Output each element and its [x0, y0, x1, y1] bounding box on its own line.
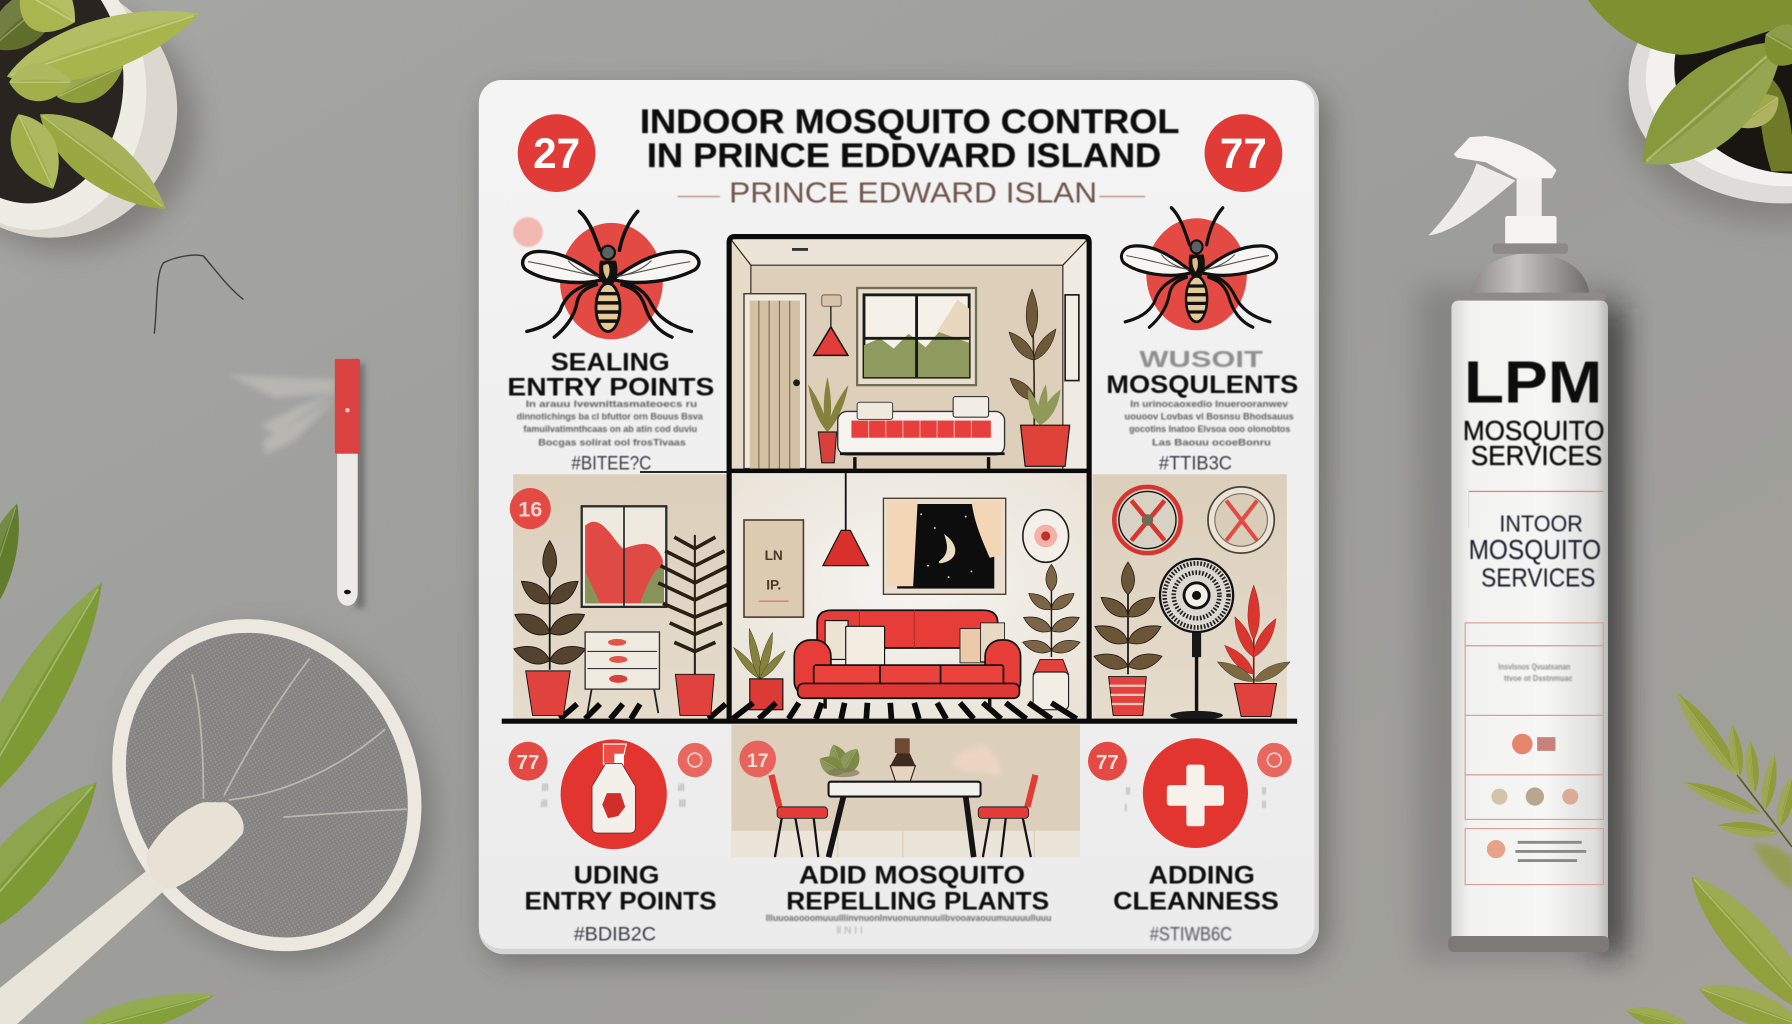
pendant lamp — [823, 473, 869, 566]
text block: cleanness: ADDING — [1149, 861, 1255, 889]
text block: sealing entry points: dinnotichings ba cl bfuttor orn Bouus Bsva — [517, 411, 704, 421]
text block: sealing entry points: SEALING — [551, 348, 670, 376]
nozzle — [1429, 136, 1557, 245]
text block: mosquito repellents: uouoov Lovbas vl Bosnsu Bhodsauus — [1125, 411, 1294, 421]
label rules and boxes: lnsvlsnos Qvuatsanan — [1498, 663, 1570, 672]
brand text: LPM — [1464, 348, 1602, 415]
label rules and boxes — [1465, 491, 1603, 885]
panel: right middle room — [1091, 474, 1293, 720]
faint marks: lll — [679, 799, 686, 810]
panel: lower centre dining scene: llluuoaoooomuuulllinvnuonlnvuonuunnuuilbvooavaouumuuuuulluuu — [766, 913, 1051, 923]
plant with white pot — [1020, 564, 1082, 710]
wall lamp — [814, 295, 848, 355]
badge: left 27: 27 — [533, 130, 580, 177]
faint marks: ill — [541, 799, 547, 810]
faint marks — [541, 783, 686, 810]
panel: lower right first-aid card: l — [1125, 803, 1127, 814]
plant: top left potted plant — [0, 0, 207, 251]
icon: right mosquito — [1121, 208, 1277, 330]
badge: right 77: 77 — [1220, 130, 1267, 177]
left chair — [771, 775, 827, 857]
faint marks: lll — [542, 783, 549, 794]
red plant — [1215, 585, 1293, 717]
striped floor — [733, 703, 1077, 719]
badge: 17 — [747, 750, 769, 772]
brand text: MOSQUITO — [1463, 415, 1605, 446]
red sofa — [794, 610, 1021, 709]
panel: lower right first-aid card: #STIWB6C — [1150, 924, 1232, 946]
label rules and boxes: ttvoe ot Dsstnmuac — [1504, 674, 1573, 683]
poster: LN — [765, 548, 783, 563]
palm plant — [658, 535, 731, 715]
text block: mosquito repellents: In urinocaoxedio Inuerooranwev — [1130, 399, 1289, 409]
badge — [739, 741, 776, 777]
text block: mosquito repellents: MOSQULENTS — [1106, 371, 1298, 399]
panel: lower right first-aid card: ll — [1262, 800, 1266, 811]
icon: repellent bottle — [561, 739, 667, 849]
text block: repelling plants: REPELLING PLANTS — [786, 888, 1049, 916]
subtitle: PRINCE EDWARD ISLAN — [729, 177, 1097, 209]
badge — [509, 742, 547, 781]
dresser — [585, 632, 659, 713]
bottom rim — [1448, 936, 1609, 952]
brand text — [1463, 348, 1605, 471]
blurred plants — [815, 742, 865, 780]
can body — [1451, 301, 1608, 945]
icon: no sign one — [1114, 487, 1181, 553]
text block: mosquito repellents: gocotins Inatoo Elvsoa ooo olonobtos — [1129, 424, 1290, 434]
floor stripes — [560, 704, 726, 719]
panel: lower left bottle card — [509, 739, 717, 946]
text block: mosquito repellents — [1106, 346, 1298, 475]
night window — [883, 498, 1006, 594]
fan — [1160, 559, 1233, 720]
poster: IP. — [766, 578, 781, 593]
badge: 77 — [1096, 751, 1119, 774]
text block: cleanness: CLEANNESS — [1113, 888, 1279, 916]
round wall plate — [1023, 510, 1069, 562]
thin squiggle — [154, 255, 243, 334]
panel: lower centre dining scene — [731, 725, 1080, 937]
product label text: SERVICES — [1481, 562, 1595, 592]
product label text: MOSQUITO — [1469, 534, 1601, 565]
faint marks: ill — [678, 783, 685, 794]
brand text: SERVICES — [1471, 440, 1602, 471]
right chair — [978, 775, 1035, 857]
small plant — [731, 628, 788, 710]
text block: mosquito repellents: #TTIB3C — [1159, 453, 1232, 475]
text block: entry points — [525, 861, 717, 916]
badge: 77 — [517, 751, 539, 774]
panel: lower right first-aid card — [1088, 738, 1291, 946]
icon: spray can — [1417, 136, 1624, 960]
panel: lower left bottle card: #BDIB2C — [574, 924, 656, 946]
badge: right 77 — [1205, 114, 1282, 192]
icon: no sign two — [1208, 487, 1274, 553]
text block: sealing entry points: In arauu lvewnittasmateoecs ru — [526, 399, 697, 409]
text block: mosquito repellents: Las Baouu ocoeBonru — [1152, 438, 1271, 448]
panel: lower centre dining scene: ll N I I — [837, 926, 863, 937]
tall plant — [1005, 289, 1070, 466]
icon: red cross circle — [1143, 738, 1248, 848]
wall picture — [1065, 295, 1079, 381]
window — [857, 288, 976, 385]
text block: sealing entry points: #BITEE?C — [571, 453, 651, 475]
text block: sealing entry points: Bocgas solirat ool frosTivaas — [538, 438, 686, 448]
heading: title — [640, 103, 1179, 175]
text block: cleanness — [1113, 861, 1279, 916]
window — [582, 506, 666, 607]
badge: 16: 16 — [518, 497, 542, 522]
plant — [1091, 562, 1165, 715]
panel: main infographic card — [479, 80, 1328, 962]
text block: sealing entry points: famuilvatimnthcaas on ab atin cod duviu — [523, 424, 697, 434]
door — [744, 294, 806, 469]
icon: red and white pen with mist — [229, 359, 365, 608]
panel: left middle room — [510, 474, 731, 720]
heading: title: INDOOR MOSQUITO CONTROL — [640, 103, 1179, 141]
panel: lower right first-aid card: ll — [1262, 786, 1266, 797]
product label text: INTOOR — [1499, 510, 1583, 536]
text block: sealing entry points: ENTRY POINTS — [507, 373, 714, 401]
text block: mosquito repellents: WUSOIT — [1139, 346, 1263, 372]
metal dome — [1454, 243, 1606, 302]
small plant — [805, 377, 852, 463]
badge: left 27 — [518, 114, 595, 192]
text block: repelling plants: ADID MOSQUITO — [799, 861, 1025, 889]
text block: entry points: UDING — [574, 861, 659, 889]
panel: top centre room — [729, 238, 1089, 472]
table — [829, 782, 981, 857]
text block: repelling plants — [786, 861, 1049, 916]
heading: title: IN PRINCE EDDVARD ISLAND — [647, 137, 1161, 175]
plant: top right potted plant — [1586, 0, 1792, 223]
panel: centre living room — [730, 473, 1088, 720]
text block: sealing entry points — [507, 348, 714, 475]
vase — [890, 738, 915, 783]
plant: lower right sprig — [1624, 687, 1792, 1024]
panel: lower right first-aid card: ll — [1126, 786, 1130, 797]
product label text — [1469, 510, 1601, 592]
sofa — [838, 397, 1005, 469]
plant: lower left leaves — [0, 498, 218, 1024]
badge — [1088, 742, 1127, 781]
badge: 16 — [510, 488, 551, 529]
icon: mosquito swatter net — [0, 562, 492, 1024]
poster — [744, 520, 803, 617]
icon: left mosquito — [513, 211, 699, 339]
floor line and frame — [502, 237, 1297, 721]
text block: entry points: ENTRY POINTS — [525, 888, 717, 916]
plant — [511, 541, 588, 715]
